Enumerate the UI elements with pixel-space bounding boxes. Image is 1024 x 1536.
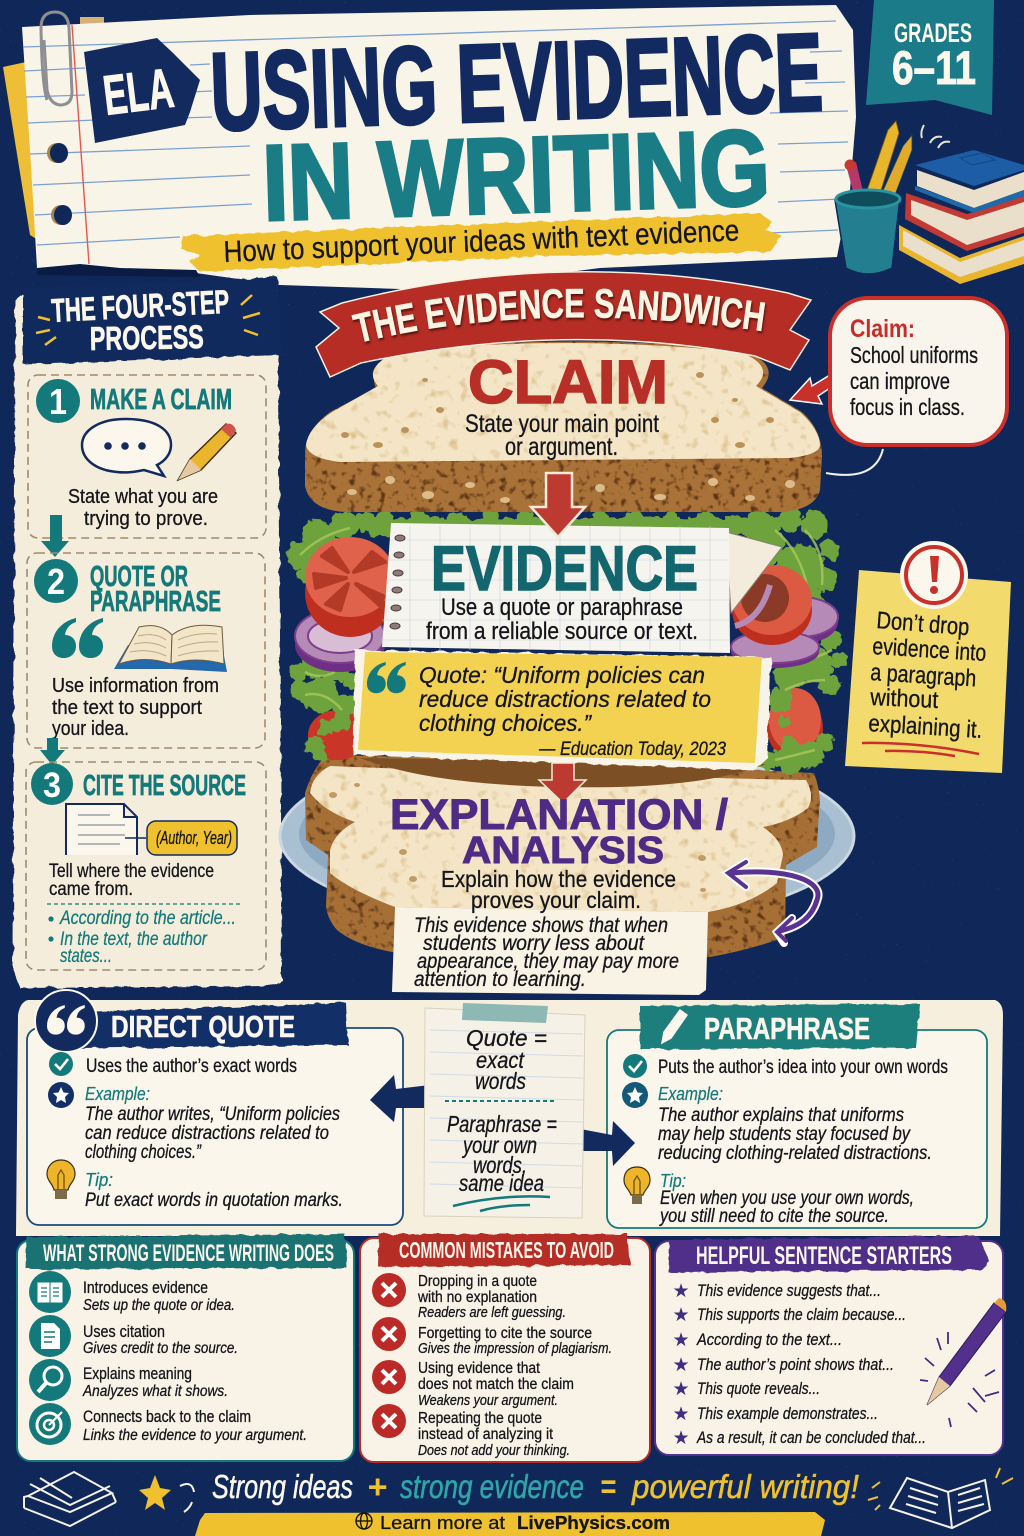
panel: common mistakes to avoid — [360, 1234, 650, 1462]
card: direct quote: The author writes, “Uniform policies — [85, 1104, 340, 1125]
step 1: make a claim: trying to prove. — [84, 508, 208, 530]
sandwich: filling underside — [360, 758, 766, 787]
icon: open book — [114, 625, 227, 672]
icon: x — [372, 1273, 406, 1307]
callout: warning sticky note: without — [869, 684, 939, 714]
icon: target — [29, 1403, 71, 1445]
card: direct quote: Uses the author’s exact words — [86, 1056, 297, 1077]
panel: quote vs paraphrase — [16, 990, 1003, 1236]
motion marks near books — [921, 125, 950, 148]
step 1: make a claim — [28, 375, 266, 538]
star bullets: ★ — [672, 1379, 690, 1400]
title: IN WRITING — [261, 107, 771, 243]
panel: common mistakes to avoid: instead of analyzing it — [418, 1426, 553, 1443]
punch holes — [47, 143, 72, 225]
arrow: to paraphrase — [575, 1121, 635, 1166]
title — [209, 11, 824, 243]
star bullets: ★ — [672, 1330, 690, 1351]
ELA badge: ELA — [100, 56, 177, 127]
torn dark edge — [37, 264, 200, 277]
panel: helpful sentence starters: As a result, it can be concluded that... — [696, 1428, 926, 1447]
center note: quote = exact words: exact — [476, 1047, 525, 1073]
step 3: cite the source: 3 — [43, 766, 61, 805]
step 1: make a claim: State what you are — [68, 486, 218, 508]
arrow: step 1 to 2 — [41, 515, 69, 557]
quote card: — Education Today, 2023 — [538, 739, 726, 760]
step 3: cite the source: (Author, Year) — [156, 828, 232, 848]
footer slogan — [212, 1468, 859, 1505]
arrow: claim to evidence — [531, 473, 585, 537]
panel: what strong evidence writing does: Introduces evidence — [83, 1278, 208, 1297]
arrow: to direct quote — [370, 1075, 430, 1122]
sandwich: bottom bread slice — [305, 755, 820, 957]
panel: four-step process — [13, 277, 282, 988]
card: paraphrase: may help students stay focused by — [658, 1124, 911, 1145]
icon: pencil — [662, 1010, 687, 1043]
arrow: step 2 to 3 — [40, 738, 65, 765]
card: paraphrase: Even when you use your own words, — [660, 1188, 914, 1209]
arrow: purple loop — [728, 862, 818, 943]
card: direct quote: Example: — [85, 1084, 150, 1104]
icon: x — [372, 1404, 406, 1438]
panel: common mistakes to avoid: Repeating the quote — [418, 1410, 542, 1427]
panel: what strong evidence writing does: Links the evidence to your argument. — [83, 1427, 307, 1444]
claim layer text: State your main point — [465, 410, 659, 438]
quote card — [353, 650, 771, 770]
claim layer text: or argument. — [505, 433, 618, 461]
panel: helpful sentence starters: This quote reveals... — [697, 1379, 820, 1398]
explanation example note — [392, 907, 708, 995]
step 2: quote or paraphrase: PARAPHRASE — [90, 586, 221, 618]
icon: star — [622, 1082, 648, 1108]
callout: claim example: can improve — [850, 368, 950, 394]
callout: claim example: focus in class. — [850, 394, 965, 420]
explanation example note: attention to learning. — [414, 968, 586, 991]
icon: book stack — [899, 150, 1024, 284]
panel: common mistakes to avoid: Using evidence that — [418, 1360, 540, 1377]
step 3: cite the source: According to the article... — [59, 908, 236, 929]
evidence note card: Use a quote or paraphrase — [441, 594, 683, 621]
card: direct quote: can reduce distractions related to — [85, 1123, 329, 1144]
explanation example note: This evidence shows that when — [414, 914, 668, 937]
panel: helpful sentence starters: This supports the claim because... — [697, 1305, 906, 1324]
section header: the four-step process — [23, 277, 282, 364]
panel: common mistakes to avoid: COMMON MISTAKES TO AVOID — [399, 1237, 614, 1263]
plate — [280, 744, 854, 928]
center note: quote = exact words: your own — [461, 1132, 537, 1158]
icon: open book outline — [868, 1468, 1013, 1528]
footer link strip: Learn more at — [380, 1513, 505, 1533]
callout: claim example — [790, 298, 1007, 445]
footer slogan: = — [600, 1468, 616, 1505]
icon: purple pencil — [920, 1298, 1006, 1427]
card: direct quote: Put exact words in quotation marks. — [85, 1190, 343, 1211]
icon: pencil — [178, 424, 236, 480]
sandwich: top bread slice — [305, 341, 822, 512]
lettuce highlights — [300, 528, 832, 760]
step 2: quote or paraphrase: QUOTE OR — [90, 561, 188, 593]
icon: check — [623, 1054, 647, 1078]
claim layer text — [465, 348, 668, 461]
tape scrap — [80, 17, 104, 26]
center note: quote = exact words: same idea — [459, 1170, 544, 1196]
sandwich: onion rings — [295, 597, 838, 672]
footer slogan: powerful writing! — [631, 1468, 859, 1505]
icon: magnifier — [29, 1359, 71, 1401]
step 3: cite the source: states... — [60, 946, 112, 967]
star bullets: ★ — [672, 1305, 690, 1326]
center note: quote = exact words: words, — [473, 1152, 527, 1178]
card: paraphrase: The author explains that uniforms — [658, 1105, 904, 1126]
card: paraphrase: Tip: — [660, 1171, 686, 1191]
seeds on crust — [347, 476, 795, 503]
panel: helpful sentence starters: According to the text... — [696, 1330, 842, 1349]
explanation example note: students worry less about — [423, 932, 645, 955]
center note: quote = exact words: words — [475, 1068, 526, 1094]
header: notebook paper banner — [3, 5, 856, 290]
center note: quote = exact words: Quote = — [466, 1025, 547, 1051]
panel: what strong evidence writing does: WHAT STRONG EVIDENCE WRITING DOES — [43, 1240, 334, 1267]
quote card: clothing choices.” — [419, 710, 592, 736]
yellow notepad behind paper — [3, 62, 38, 240]
sparkle marks — [180, 1484, 194, 1512]
claim layer text: CLAIM — [468, 348, 668, 416]
seeds on crumb — [341, 372, 774, 448]
card: direct quote: DIRECT QUOTE — [111, 1009, 295, 1044]
icon: star — [48, 1082, 74, 1108]
star bullets: ★ — [672, 1428, 690, 1449]
arrow: evidence to explanation — [539, 763, 586, 803]
panel: what strong evidence writing does: Analyzes what it shows. — [82, 1383, 228, 1400]
panel: common mistakes to avoid: Gives the impression of plagiarism. — [418, 1340, 612, 1357]
grades ribbon: GRADES — [894, 18, 972, 48]
panel: common mistakes to avoid: Readers are left guessing. — [418, 1304, 566, 1321]
evidence note card: from a reliable source or text. — [426, 618, 698, 645]
panel: what strong evidence writing does: Connects back to the claim — [83, 1407, 251, 1426]
explanation layer text — [390, 791, 728, 913]
sandwich: lower tomato slices — [308, 688, 823, 760]
icon: paperclip — [41, 12, 72, 105]
footer slogan: strong evidence — [400, 1468, 584, 1505]
quote card: reduce distractions related to — [419, 686, 711, 712]
callout: warning sticky note: Don’t drop — [876, 607, 970, 641]
notebook paper — [22, 5, 856, 290]
citation tag — [147, 821, 237, 855]
step 3: cite the source: CITE THE SOURCE — [83, 770, 246, 802]
icon: globe — [356, 1513, 372, 1529]
panel: common mistakes to avoid: does not match the claim — [418, 1376, 574, 1393]
grades ribbon: 6–11 — [892, 41, 976, 94]
section ribbon: the evidence sandwich: THE EVIDENCE SANDWICH — [352, 288, 768, 345]
icon: books outline — [24, 1472, 116, 1526]
icon: exclamation — [900, 541, 968, 609]
evidence note card: EVIDENCE — [431, 534, 698, 604]
subtitle with yellow brush stroke: How to support your ideas with text evidence — [223, 214, 740, 269]
step 3: cite the source — [26, 762, 266, 970]
folded paper scrap — [726, 532, 782, 613]
panel: common mistakes to avoid: with no explanation — [417, 1289, 537, 1306]
panel: common mistakes to avoid: Weakens your argument. — [418, 1392, 558, 1409]
quote card: Quote: “Uniform policies can — [419, 662, 705, 688]
explanation layer text: ANALYSIS — [462, 830, 664, 872]
step 3: cite the source: In the text, the author — [60, 929, 208, 950]
step 2: quote or paraphrase: Use information from — [52, 675, 219, 697]
ruled lines — [23, 21, 848, 245]
panel: what strong evidence writing does: Explains meaning — [83, 1364, 192, 1383]
step 3: cite the source: Tell where the evidence — [49, 861, 214, 882]
icon: quote marks — [52, 618, 103, 658]
ELA badge — [84, 38, 200, 143]
callout: warning sticky note: explaining it. — [868, 710, 983, 744]
panel: what strong evidence writing does: Sets up the quote or idea. — [83, 1297, 235, 1314]
card: paraphrase: reducing clothing-related distractions. — [658, 1143, 932, 1164]
card: paraphrase — [607, 1004, 987, 1228]
icon: book — [29, 1271, 71, 1313]
explanation layer text: Explain how the evidence — [441, 866, 676, 892]
center note: quote = exact words — [424, 1003, 585, 1218]
footer slogan: + — [367, 1468, 387, 1505]
card: paraphrase: you still need to cite the source. — [658, 1206, 889, 1227]
star bullets: ★ — [672, 1281, 690, 1302]
white curl — [826, 449, 883, 475]
star bullets: ★ — [672, 1355, 690, 1376]
quote marks — [47, 1005, 85, 1035]
icon: check — [49, 1052, 73, 1076]
explanation layer text: proves your claim. — [471, 887, 641, 913]
icon: pencil cup — [835, 121, 912, 274]
panel: common mistakes to avoid: Dropping in a quote — [418, 1273, 537, 1290]
section header: the four-step process: THE FOUR-STEP — [50, 283, 230, 329]
icon: x — [372, 1360, 406, 1394]
callout: warning sticky note: evidence into — [872, 633, 987, 667]
panel: common mistakes to avoid: Does not add your thinking. — [418, 1442, 570, 1459]
panel: common mistakes to avoid: Forgetting to cite the source — [418, 1325, 592, 1342]
step 2: quote or paraphrase: 2 — [47, 561, 65, 602]
icon: speech bubble — [82, 419, 171, 476]
panel: helpful sentence starters: The author’s point shows that... — [697, 1355, 894, 1374]
icon: x — [372, 1317, 406, 1351]
card: paraphrase: PARAPHRASE — [704, 1011, 870, 1046]
icon: quote marks — [367, 662, 406, 693]
step 2: quote or paraphrase — [27, 553, 265, 748]
step 1: make a claim: MAKE A CLAIM — [90, 384, 232, 416]
icon: light bulb — [624, 1167, 650, 1204]
footer link strip: LivePhysics.com — [517, 1513, 670, 1533]
card: direct quote: Tip: — [85, 1170, 113, 1190]
panel: what strong evidence writing does: Uses citation — [83, 1322, 165, 1341]
grades ribbon — [866, 0, 994, 115]
step 1: make a claim: 1 — [49, 381, 67, 422]
card: paraphrase: Example: — [658, 1084, 723, 1104]
panel: helpful sentence starters: This evidence suggests that... — [697, 1281, 881, 1300]
card: direct quote — [27, 990, 403, 1225]
panel: what strong evidence writing does — [17, 1234, 354, 1461]
icon: light bulb — [47, 1160, 75, 1199]
explanation example note: appearance, they may pay more — [417, 950, 679, 973]
callout: warning sticky note — [845, 541, 1011, 773]
callout: warning sticky note: a paragraph — [870, 659, 977, 692]
section header: the four-step process: PROCESS — [89, 318, 204, 357]
card: direct quote: clothing choices.” — [85, 1142, 202, 1163]
star bullets: ★ — [672, 1404, 690, 1425]
callout: claim example: School uniforms — [850, 342, 978, 368]
explanation layer text: EXPLANATION / — [390, 791, 728, 839]
footer link strip — [195, 1512, 825, 1536]
icon: document — [66, 804, 137, 855]
section ribbon: the evidence sandwich — [315, 271, 812, 378]
panel: helpful sentence starters — [655, 1236, 1006, 1455]
sandwich: lettuce — [286, 508, 848, 774]
star bullets — [672, 1281, 690, 1449]
icon: gold star — [139, 1475, 171, 1510]
panel: what strong evidence writing does: Gives credit to the source. — [83, 1340, 238, 1357]
evidence note card — [381, 523, 782, 653]
step 3: cite the source: came from. — [49, 879, 133, 900]
step 2: quote or paraphrase: the text to support — [52, 697, 202, 719]
icon: citation document — [29, 1315, 71, 1357]
center note: quote = exact words: Paraphrase = — [447, 1111, 557, 1137]
step 2: quote or paraphrase: your idea. — [52, 718, 129, 740]
panel: helpful sentence starters: This example demonstrates... — [697, 1404, 878, 1423]
sandwich: upper tomato slices — [305, 537, 812, 645]
footer slogan: Strong ideas — [212, 1468, 353, 1505]
callout: claim example: Claim: — [850, 315, 915, 343]
card: paraphrase: Puts the author’s idea into your own words — [658, 1057, 948, 1078]
